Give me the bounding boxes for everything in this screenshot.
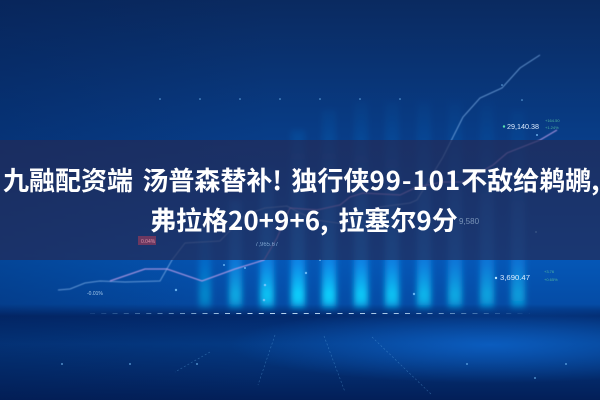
label: red badge: 0.04%: [141, 239, 156, 245]
chart background with glowing columns and lines: +0.65%: [544, 277, 558, 282]
glowing columns: [199, 100, 525, 310]
chart background with glowing columns and lines: +3.76: [544, 269, 555, 274]
label: red badge: [138, 236, 156, 245]
label: 3,690.47: 3,690.47: [500, 273, 530, 282]
chart background with glowing columns and lines: +1.24%: [545, 125, 559, 130]
perspective floor lines: [175, 335, 432, 395]
label: 29,140.38: 29,140.38: [507, 122, 539, 131]
purple line series: [110, 130, 557, 281]
label: 7,965.67: 7,965.67: [255, 242, 279, 248]
label: 9,580: 9,580: [459, 217, 480, 226]
title line 2: 弗拉格20+9+6, 拉塞尔9分: [150, 201, 458, 238]
dashed baseline: [90, 312, 530, 314]
chart background with glowing columns and lines: +164.50: [545, 118, 560, 123]
blue line series: [58, 55, 540, 290]
dark caption band: [0, 140, 600, 260]
scattered dots: [61, 84, 567, 379]
title line 1: 九融配资端 汤普森替补! 独行侠99-101不敌给鹈鹕,: [3, 161, 600, 198]
label: percent: -0.01%: [87, 291, 103, 297]
